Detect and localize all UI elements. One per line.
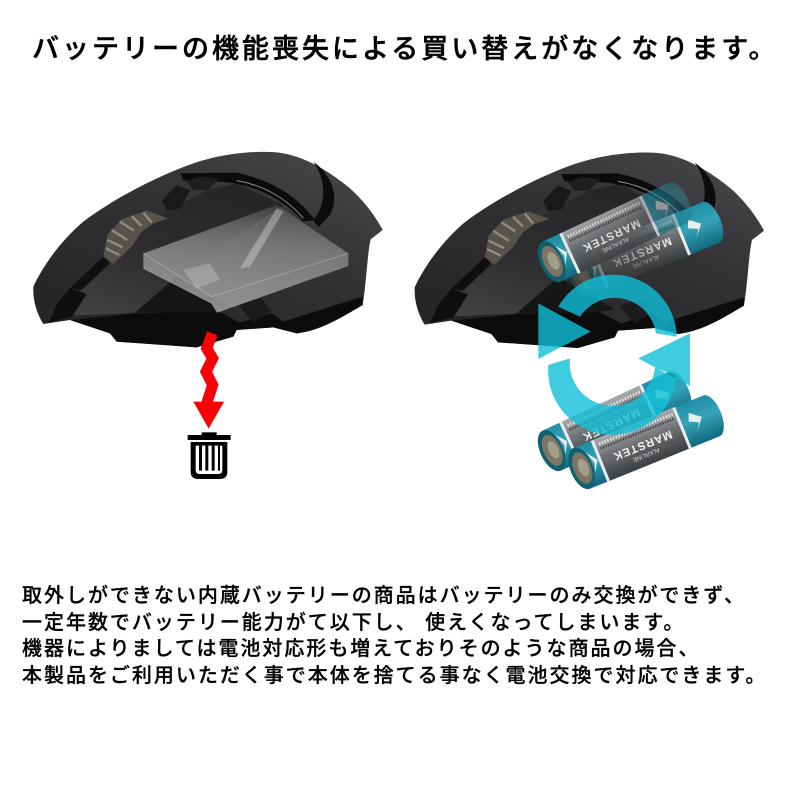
panel: mouse with built-in battery	[33, 152, 383, 479]
description text	[22, 584, 767, 687]
description text: 取外しができない内蔵バッテリーの商品はバッテリーのみ交換ができず、	[22, 585, 746, 607]
mouse body	[33, 152, 383, 347]
transparent batteries inside mouse	[538, 182, 724, 288]
description text: 本製品をご利用いただく事で本体を捨てる事なく電池交換で対応できます。	[22, 665, 767, 687]
description text: 機器によりましては電池対応形も増えておりそのような商品の場合、	[22, 638, 700, 660]
panel: mouse with replaceable AA batteries	[415, 153, 764, 493]
icon: trash can	[188, 432, 231, 479]
cycle arrows	[538, 275, 690, 435]
built-in battery pack	[143, 205, 348, 313]
red zigzag arrow	[193, 333, 224, 429]
mouse body	[415, 153, 764, 348]
title: バッテリーの機能喪失による買い替えがなくなります。	[32, 34, 778, 64]
lower pair of AA batteries	[532, 367, 729, 493]
description text: 一定年数でバッテリー能力がて以下し、 使えくなってしまいます。	[22, 612, 685, 634]
